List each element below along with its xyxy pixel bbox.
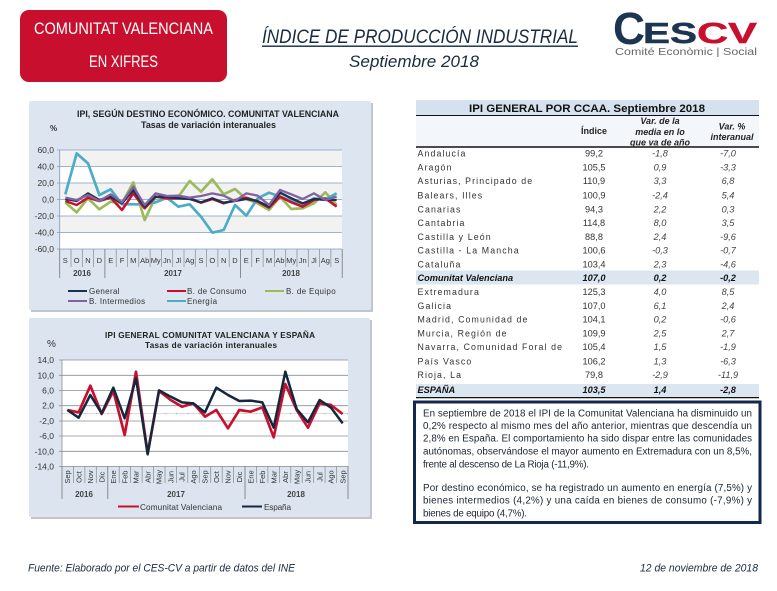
line chart: Comunitat Valenciana y España: Sep [201, 470, 210, 484]
text box: commentary: 0,2% respecto al mismo mes del año anterior, mientras que descendía un [423, 421, 752, 432]
table rows: ESPAÑA [418, 385, 455, 395]
line chart: destino económico: E [244, 256, 249, 265]
table rows: Cataluña [418, 259, 462, 269]
panel: IPI Comunitat Valenciana y España [29, 318, 372, 519]
text box: commentary: En septiembre de 2018 el IPI de la Comunitat Valenciana ha disminuido un [423, 408, 752, 420]
table rows: 2,5 [653, 328, 667, 338]
table rows: 5,4 [722, 190, 734, 200]
date: 12 de noviembre de 2018 [640, 562, 759, 574]
line chart: destino económico: Jn [163, 256, 171, 265]
line chart: destino económico: N [221, 256, 226, 265]
table rows: Galicia [418, 301, 452, 311]
table rows: 1,4 [654, 385, 666, 395]
line chart: Comunitat Valenciana y España: Oct [212, 470, 221, 483]
table rows: 105,5 [582, 162, 606, 172]
line chart: Comunitat Valenciana y España: -10,0 [35, 446, 54, 456]
table rows: -1,9 [720, 342, 736, 352]
table rows: Comunitat Valenciana [418, 273, 513, 283]
table rows: 104,1 [582, 314, 606, 324]
line chart: destino económico: O [74, 256, 80, 265]
line chart: destino económico: Ag [321, 256, 330, 265]
line chart: destino económico: D [232, 256, 238, 265]
panel: IPI por destino económico [29, 101, 373, 312]
header badge: COMUNITAT VALENCIANA [34, 20, 213, 38]
line chart: destino económico: Ab [140, 256, 149, 265]
text box: commentary: Por destino económico, se ha registrado un aumento en energía (7,5%) y [423, 483, 752, 494]
line chart: destino económico: My [151, 256, 161, 265]
line chart: Comunitat Valenciana y España: Feb [258, 471, 267, 483]
table rows: -4,6 [720, 259, 737, 269]
line chart: Comunitat Valenciana y España: Ene [246, 470, 255, 484]
table rows: 6,8 [722, 176, 735, 186]
line chart: destino económico: M [130, 256, 136, 265]
text box: commentary: frente al descenso de La Rioja (-11,9%). [423, 460, 589, 470]
table rows: 2,2 [653, 204, 666, 214]
line chart: Comunitat Valenciana y España: Abr [143, 471, 152, 483]
column headers: Var. de la [640, 116, 680, 126]
logo: CESCV: Comité Econòmic | Social [615, 46, 757, 58]
table rows: -3,3 [720, 162, 737, 172]
table rows: 79,8 [585, 370, 603, 380]
legend: destino económico: B. Intermedios [89, 297, 145, 306]
legend: Comunitat Valenciana y España: Comunitat Valenciana [140, 503, 222, 512]
table rows: 8,0 [654, 218, 667, 228]
table rows: 94,3 [585, 204, 603, 214]
table rows: País Vasco [418, 356, 472, 366]
table rows: 106,2 [582, 356, 606, 366]
column headers [581, 116, 754, 148]
table rows: Canarias [418, 204, 462, 214]
table rows: 0,2 [654, 314, 666, 324]
source note: Fuente: Elaborado por el CES-CV a partir de datos del INE [28, 562, 296, 574]
table rows: 125,3 [582, 287, 606, 297]
table rows: 6,1 [654, 301, 666, 311]
table rows: Asturias, Principado de [418, 176, 533, 186]
line chart: destino económico: 60,0 [37, 145, 54, 155]
table rows: 88,8 [585, 232, 603, 242]
line chart: destino económico: My [286, 256, 297, 265]
legend: destino económico: B. de Equipo [286, 287, 336, 296]
line chart: destino económico: S [334, 256, 339, 265]
table rows: 100,9 [582, 190, 606, 200]
line chart: destino económico: F [255, 256, 260, 265]
line chart: destino económico: 0,0 [42, 194, 54, 204]
line chart: destino económico: E [108, 256, 113, 265]
line chart: destino económico: 40,0 [37, 162, 54, 172]
legend: Comunitat Valenciana y España [118, 503, 291, 512]
text box: commentary: autónomas, observándose el mayor aumento en Extremadura con un 8,5%, [423, 446, 752, 458]
line chart: Comunitat Valenciana y España: May [292, 470, 301, 484]
table rows: 2,4 [653, 232, 666, 242]
line chart: Comunitat Valenciana y España: Abr [281, 471, 290, 483]
line chart: Comunitat Valenciana y España: Dic [235, 471, 244, 482]
line chart: destino económico: O [209, 256, 215, 265]
table rows: -9,6 [720, 232, 737, 242]
line chart: Comunitat Valenciana y España: Nov [224, 470, 233, 484]
line chart: Comunitat Valenciana y España: Mar [132, 470, 141, 483]
column headers: interanual [710, 132, 754, 142]
line chart: Comunitat Valenciana y España: 6,0 [42, 385, 54, 395]
table rows: -7,0 [720, 148, 737, 158]
line chart: Comunitat Valenciana y España: % [47, 339, 56, 350]
table rows: 4,0 [654, 287, 667, 297]
table rows: 1,3 [654, 356, 667, 366]
table rows: -1,8 [652, 148, 669, 158]
table rows: Aragón [418, 162, 452, 172]
line chart: Comunitat Valenciana y España: -6,0 [39, 431, 54, 441]
text box: commentary: bienes de equipo (4,7%). [423, 508, 527, 520]
legend: destino económico: Energía [187, 297, 218, 306]
line chart: Comunitat Valenciana y España: 2017 [167, 490, 185, 499]
table rows: -6,3 [720, 356, 737, 366]
legend: destino económico [68, 287, 336, 306]
line chart: destino económico: % [50, 124, 57, 133]
line chart: destino económico: 2017 [164, 269, 182, 278]
table rows: 0,2 [654, 273, 667, 283]
table rows: -2,8 [720, 385, 737, 395]
table rows: 105,4 [582, 342, 606, 352]
line chart: Comunitat Valenciana y España: Dic [97, 471, 106, 482]
line chart: destino económico: Jl [311, 256, 317, 265]
table rows: Rioja, La [418, 370, 462, 380]
line chart: Comunitat Valenciana y España: 2016 [75, 490, 93, 499]
chart title [77, 108, 339, 130]
legend: destino económico: General [89, 287, 120, 296]
line chart: destino económico [35, 124, 342, 278]
line chart: Comunitat Valenciana y España: Oct [74, 470, 83, 483]
table rows: Navarra, Comunidad Foral de [418, 342, 563, 352]
table rows: 0,9 [654, 162, 666, 172]
column headers: media en lo [635, 127, 685, 137]
legend: Comunitat Valenciana y España: España [264, 503, 291, 512]
line chart: destino económico: S [63, 256, 68, 265]
column headers: Índice [581, 126, 607, 136]
line chart: destino económico: F [120, 256, 125, 265]
line chart: destino económico: Jn [299, 256, 307, 265]
chart title: Tasas de variación interanuales [145, 341, 277, 350]
table rows: -0,6 [720, 314, 737, 324]
line chart: Comunitat Valenciana y España: Sep [63, 470, 72, 484]
logo: CESCV: C [613, 3, 645, 54]
line chart: destino económico: 20,0 [37, 178, 54, 188]
line chart: destino económico: Ag [185, 256, 194, 265]
text box: commentary: 2,8% en España. El comportamiento ha sido dispar entre las comunidades [423, 434, 752, 445]
line chart: Comunitat Valenciana y España: Ago [327, 470, 336, 484]
line chart: destino económico: -60,0 [35, 244, 54, 254]
line chart: Comunitat Valenciana y España: -14,0 [35, 461, 54, 471]
table: IPI general por CCAA [416, 100, 759, 398]
table rows: 8,5 [722, 287, 735, 297]
line chart: Comunitat Valenciana y España: Sep [338, 470, 347, 484]
line chart: destino económico: -20,0 [35, 211, 54, 221]
table heading: IPI GENERAL POR CCAA. Septiembre 2018 [469, 103, 705, 115]
title: Septiembre 2018 [349, 52, 480, 71]
table rows: -2,9 [652, 370, 668, 380]
table rows: 103,5 [582, 385, 606, 395]
table rows: 3,5 [722, 218, 735, 228]
line chart: Comunitat Valenciana y España: Jun [304, 471, 313, 483]
table rows: -11,9 [718, 370, 738, 380]
table rows: -0,3 [652, 246, 669, 256]
line chart: destino económico: 2018 [282, 269, 300, 278]
line chart: Comunitat Valenciana y España [35, 339, 348, 499]
chart title: IPI GENERAL COMUNITAT VALENCIANA Y ESPAÑA [105, 330, 315, 340]
table rows: 3,3 [654, 176, 667, 186]
logo: CESCV [613, 3, 758, 58]
line chart: destino económico: N [85, 256, 91, 265]
table rows: 99,2 [585, 148, 603, 158]
table rows: 2,3 [653, 259, 667, 269]
table rows [418, 148, 738, 395]
line chart: Comunitat Valenciana y España: Jul [315, 472, 324, 482]
text box: commentary [414, 402, 760, 522]
line chart: Comunitat Valenciana y España: -2,0 [39, 416, 54, 426]
table rows: 107,0 [582, 273, 606, 283]
table rows: 107,0 [582, 301, 606, 311]
line chart: Comunitat Valenciana y España: Jul [178, 472, 187, 482]
line chart: destino económico: S [198, 256, 204, 265]
line chart: Comunitat Valenciana y España: Feb [120, 471, 129, 483]
header badge: EN XIFRES [89, 53, 158, 71]
line chart: Comunitat Valenciana y España: Nov [86, 470, 95, 484]
line chart: Comunitat Valenciana y España: Ago [189, 470, 198, 484]
column headers: Var. % [719, 122, 745, 132]
table rows: Castilla y León [418, 232, 492, 242]
table rows: -2,4 [652, 190, 668, 200]
table rows: 1,5 [654, 342, 667, 352]
title: ÍNDICE DE PRODUCCIÓN INDUSTRIAL [262, 25, 578, 48]
logo: CESCV: ES [643, 18, 697, 50]
line chart: Comunitat Valenciana y España: Jun [166, 471, 175, 483]
chart title [105, 330, 315, 350]
line chart: Comunitat Valenciana y España: Ene [109, 470, 118, 484]
line chart: destino económico: -40,0 [35, 228, 54, 238]
line chart: destino económico: 2016 [73, 269, 91, 278]
header badge [20, 10, 227, 82]
table rows: 110,9 [583, 176, 605, 186]
column headers: que va de año [630, 138, 691, 148]
table rows: -0,2 [720, 273, 737, 283]
chart title: IPI, SEGÚN DESTINO ECONÓMICO. COMUNITAT VALENCIANA [77, 108, 339, 120]
legend: destino económico: B. de Consumo [187, 287, 247, 296]
table rows: Castilla - La Mancha [418, 246, 520, 256]
table rows: 0,3 [722, 204, 735, 214]
title [262, 25, 578, 71]
line chart: Comunitat Valenciana y España: May [155, 470, 164, 484]
logo: CESCV: CV [697, 18, 758, 50]
chart title: Tasas de variación interanuales [141, 120, 276, 130]
line chart: destino económico: Ab [275, 256, 285, 265]
line chart: destino económico: Jl [176, 256, 181, 265]
table rows: Madrid, Comunidad de [418, 314, 528, 324]
table rows: 2,4 [721, 301, 734, 311]
table rows: 114,8 [583, 218, 605, 228]
table rows: Murcia, Región de [418, 328, 508, 338]
table rows: 109,9 [582, 328, 606, 338]
line chart: Comunitat Valenciana y España: 14,0 [37, 355, 54, 365]
line chart: Comunitat Valenciana y España: 10,0 [37, 370, 54, 380]
table rows: -0,7 [720, 246, 737, 256]
table rows: 2,7 [721, 328, 735, 338]
line chart: Comunitat Valenciana y España: 2,0 [42, 401, 54, 411]
line chart: destino económico: M [266, 256, 272, 265]
line chart: Comunitat Valenciana y España: 2018 [287, 490, 305, 499]
text box: commentary: bienes intermedios (4,2%) y una caída en bienes de consumo (-7,9%) y [423, 496, 752, 506]
table rows: Cantabria [418, 218, 466, 228]
line chart: destino económico: D [97, 256, 103, 265]
table rows: Balears, Illes [418, 190, 483, 200]
line chart: Comunitat Valenciana y España: Mar [269, 470, 278, 483]
table rows: 100,6 [582, 246, 606, 256]
table rows: Extremadura [418, 287, 480, 297]
table rows: 103,4 [582, 259, 606, 269]
table rows: Andalucía [418, 148, 467, 158]
